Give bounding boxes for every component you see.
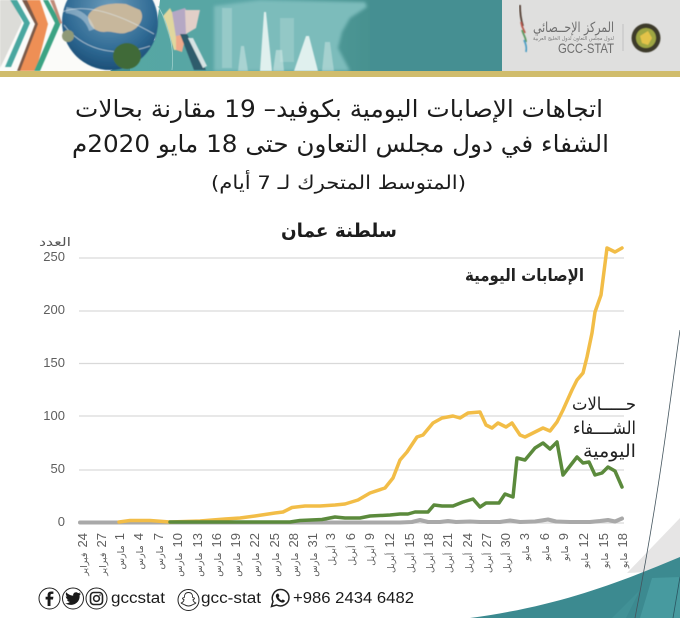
x axis date labels: 3 أبريل: [320, 533, 339, 566]
x axis date labels: 31 مارس: [302, 533, 321, 577]
logo arabic name: المركز الإحــصائي: [533, 20, 614, 36]
title line 2: الشفاء في دول مجلس التعاون حتى 18 مايو 2020م: [72, 130, 609, 158]
bottom right decoration: [470, 330, 680, 618]
x axis date labels: 12 مايو: [573, 533, 592, 569]
x axis date labels: 21 أبريل: [437, 533, 456, 573]
x axis date labels: 4 مارس: [128, 533, 147, 570]
x axis date labels: 7 مارس: [148, 533, 167, 570]
x axis date labels: 24 أبريل: [457, 533, 476, 573]
y axis labels: 150: [43, 355, 65, 370]
banner photo collage: [0, 0, 502, 71]
y axis labels: [43, 249, 65, 529]
y axis labels: 100: [43, 408, 65, 423]
x axis date labels: 15 أبريل: [399, 533, 418, 573]
y axis labels: 200: [43, 302, 65, 317]
icon: snapchat: [178, 590, 199, 610]
logo panel: [502, 0, 680, 71]
header banner: [0, 0, 680, 77]
logo latin name: GCC-STAT: [558, 40, 614, 56]
chart heading: سلطنة عمان: [281, 220, 397, 242]
label: daily recoveries: الشــــفاء: [573, 418, 636, 439]
x axis date labels: 15 مايو: [593, 533, 612, 569]
y axis labels: 250: [43, 249, 65, 264]
series: daily recoveries (green): [170, 442, 622, 522]
social media footer: [39, 588, 414, 610]
x axis date labels: 18 أبريل: [418, 533, 437, 573]
line chart: [39, 235, 636, 577]
x axis date labels: 9 مايو: [553, 533, 572, 562]
x axis date labels: 1 مارس: [109, 533, 128, 570]
icon: facebook: [39, 588, 60, 609]
label: daily recoveries: حـــــالات: [572, 394, 636, 415]
x axis date labels: 19 مارس: [225, 533, 244, 577]
logo ribbon: [520, 5, 526, 52]
x axis date labels: 27 فبراير: [91, 533, 110, 577]
logo arabic subtitle: لدول مجلس التعاون لدول الخليج العربية: [533, 36, 614, 42]
x axis date labels: 13 مارس: [187, 533, 206, 577]
gold band: [0, 71, 680, 77]
title: [72, 95, 609, 194]
x axis date labels: 6 أبريل: [340, 533, 359, 566]
x axis date labels: 10 مارس: [167, 533, 186, 577]
title line 1: اتجاهات الإصابات اليومية بكوفيد– 19 مقارنة بحالات: [75, 95, 603, 123]
gridlines: [79, 258, 624, 523]
x axis date labels: 28 مارس: [283, 533, 302, 577]
x axis date labels: 12 أبريل: [379, 533, 398, 573]
icon: whatsapp: [272, 590, 289, 606]
emblem: [632, 24, 660, 52]
x axis date labels: 25 مارس: [264, 533, 283, 577]
icon: instagram: [86, 588, 107, 609]
x axis date labels: 24 فبراير: [72, 533, 91, 577]
globe: [62, 0, 158, 70]
x axis date labels: 16 مارس: [206, 533, 225, 577]
y axis title: العدد: [39, 235, 71, 249]
series: deaths (grey): [80, 518, 622, 522]
icon: twitter: [62, 588, 84, 609]
label: daily recoveries: اليومية: [583, 441, 636, 462]
handle: gccstat: gccstat: [111, 590, 166, 607]
label: daily cases: الإصابات اليومية: [465, 266, 584, 286]
x axis date labels: 9 أبريل: [359, 533, 378, 566]
series: daily cases (yellow): [119, 248, 622, 522]
subtitle: (المتوسط المتحرك لـ 7 أيام): [211, 170, 466, 194]
x axis date labels: [72, 533, 631, 577]
phone number: +986 2434 6482: [293, 590, 414, 607]
x axis date labels: 3 مايو: [514, 533, 533, 562]
handle: gcc-stat: gcc-stat: [201, 590, 262, 607]
x axis date labels: 30 أبريل: [495, 533, 514, 573]
y axis labels: 0: [58, 514, 65, 529]
x axis date labels: 6 مايو: [534, 533, 553, 562]
x axis date labels: 22 مارس: [244, 533, 263, 577]
y axis labels: 50: [51, 461, 65, 476]
x axis date labels: 27 أبريل: [476, 533, 495, 573]
label: daily recoveries: [572, 394, 636, 462]
x axis date labels: 18 مايو: [612, 533, 631, 569]
